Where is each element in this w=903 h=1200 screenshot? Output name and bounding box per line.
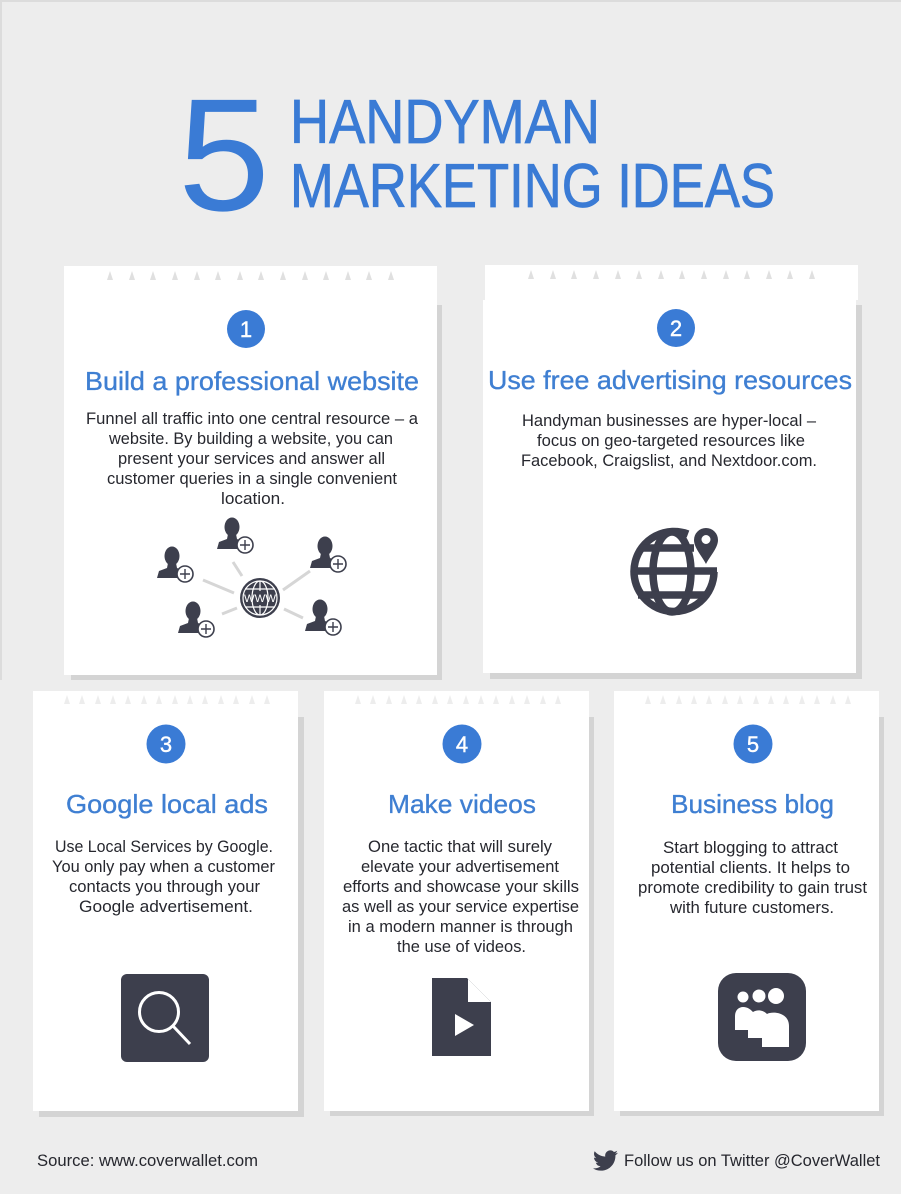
body text 2 [521,412,817,470]
icon: blog community [718,973,806,1061]
panel: card 5 [614,691,884,1116]
icon: twitter bird [593,1150,618,1171]
panel: card 2 [483,265,862,679]
icon: website network: WWW [244,593,277,605]
body text 4 [342,838,579,956]
number badge 4: 4 [456,732,468,757]
number badge 1 [227,310,265,348]
card 5 shadow [620,717,884,1116]
icon: search [121,974,209,1062]
title line 2: MARKETING IDEAS [290,152,775,221]
body text 5: promote credibility to gain trust [638,879,867,897]
body text 3: contacts you through your [69,878,260,896]
body text 2: focus on geo-targeted resources like [537,432,805,450]
body text 1: Funnel all traffic into one central resource – a [86,410,419,428]
source text: Source: www.coverwallet.com [37,1152,258,1170]
body text 4: as well as your service expertise [342,898,579,916]
body text 4: the use of videos. [397,938,526,956]
number badge 3 [146,724,186,764]
card 4 notches [355,695,561,704]
card 4 shadow [330,717,594,1116]
body text 5: with future customers. [669,899,834,917]
card 3 sheet [33,691,298,1111]
card 2 shadow [490,305,862,679]
big numeral 5: 5 [178,65,270,244]
body text 4: One tactic that will surely [368,838,553,856]
heading 5: Business blog [671,789,834,819]
body text 5: potential clients. It helps to [651,859,850,877]
title line 1: HANDYMAN [290,88,600,157]
number badge 2 [657,309,695,347]
card 3 shadow [39,717,304,1117]
heading 1: Build a professional website [85,366,419,396]
card 1 sheet [64,266,437,675]
number badge 4 [442,724,482,764]
card 2 notches [528,270,815,279]
body text 1 [86,410,419,508]
icon: website network [157,518,346,637]
panel: card 1 [64,266,442,680]
card 1 shadow [71,305,442,680]
card 4 sheet [324,691,589,1111]
body text 3: You only pay when a customer [52,858,275,876]
number badge 5: 5 [747,732,759,757]
body text 4: efforts and showcase your skills [343,878,579,896]
heading 2: Use free advertising resources [488,365,852,395]
icon: globe with location pin [632,528,718,612]
icon: video file [432,978,491,1056]
heading 4: Make videos [388,789,536,819]
body text 1: customer queries in a single convenient [107,470,397,488]
heading 3: Google local ads [66,789,268,819]
number badge 5 [734,724,772,764]
panel: card 3 [33,691,304,1117]
body text 3: Use Local Services by Google. [55,838,273,856]
body text 5: Start blogging to attract [663,839,838,857]
body text 2: Handyman businesses are hyper-local – [522,412,817,430]
twitter text: Follow us on Twitter @CoverWallet [624,1152,880,1170]
title [178,65,775,244]
body text 2: Facebook, Craigslist, and Nextdoor.com. [521,452,817,470]
number badge 2: 2 [670,316,682,341]
body text 4: elevate your advertisement [361,858,559,876]
card 3 notches [64,695,270,704]
body text 3 [52,838,275,916]
body text 5 [638,839,867,917]
body text 1: location. [221,490,285,508]
twitter follow [593,1150,880,1171]
card 2 sheet [483,265,858,673]
body text 1: website. By building a website, you can [108,430,393,448]
panel: card 4 [324,691,594,1116]
card 5 notches [645,695,851,704]
card 5 sheet [614,691,879,1111]
body text 3: Google advertisement. [79,898,253,916]
number badge 3: 3 [160,732,172,757]
body text 4: in a modern manner is through [348,918,573,936]
number badge 1: 1 [240,317,252,342]
card 1 notches [107,271,394,280]
body text 1: present your services and answer all [118,450,385,468]
